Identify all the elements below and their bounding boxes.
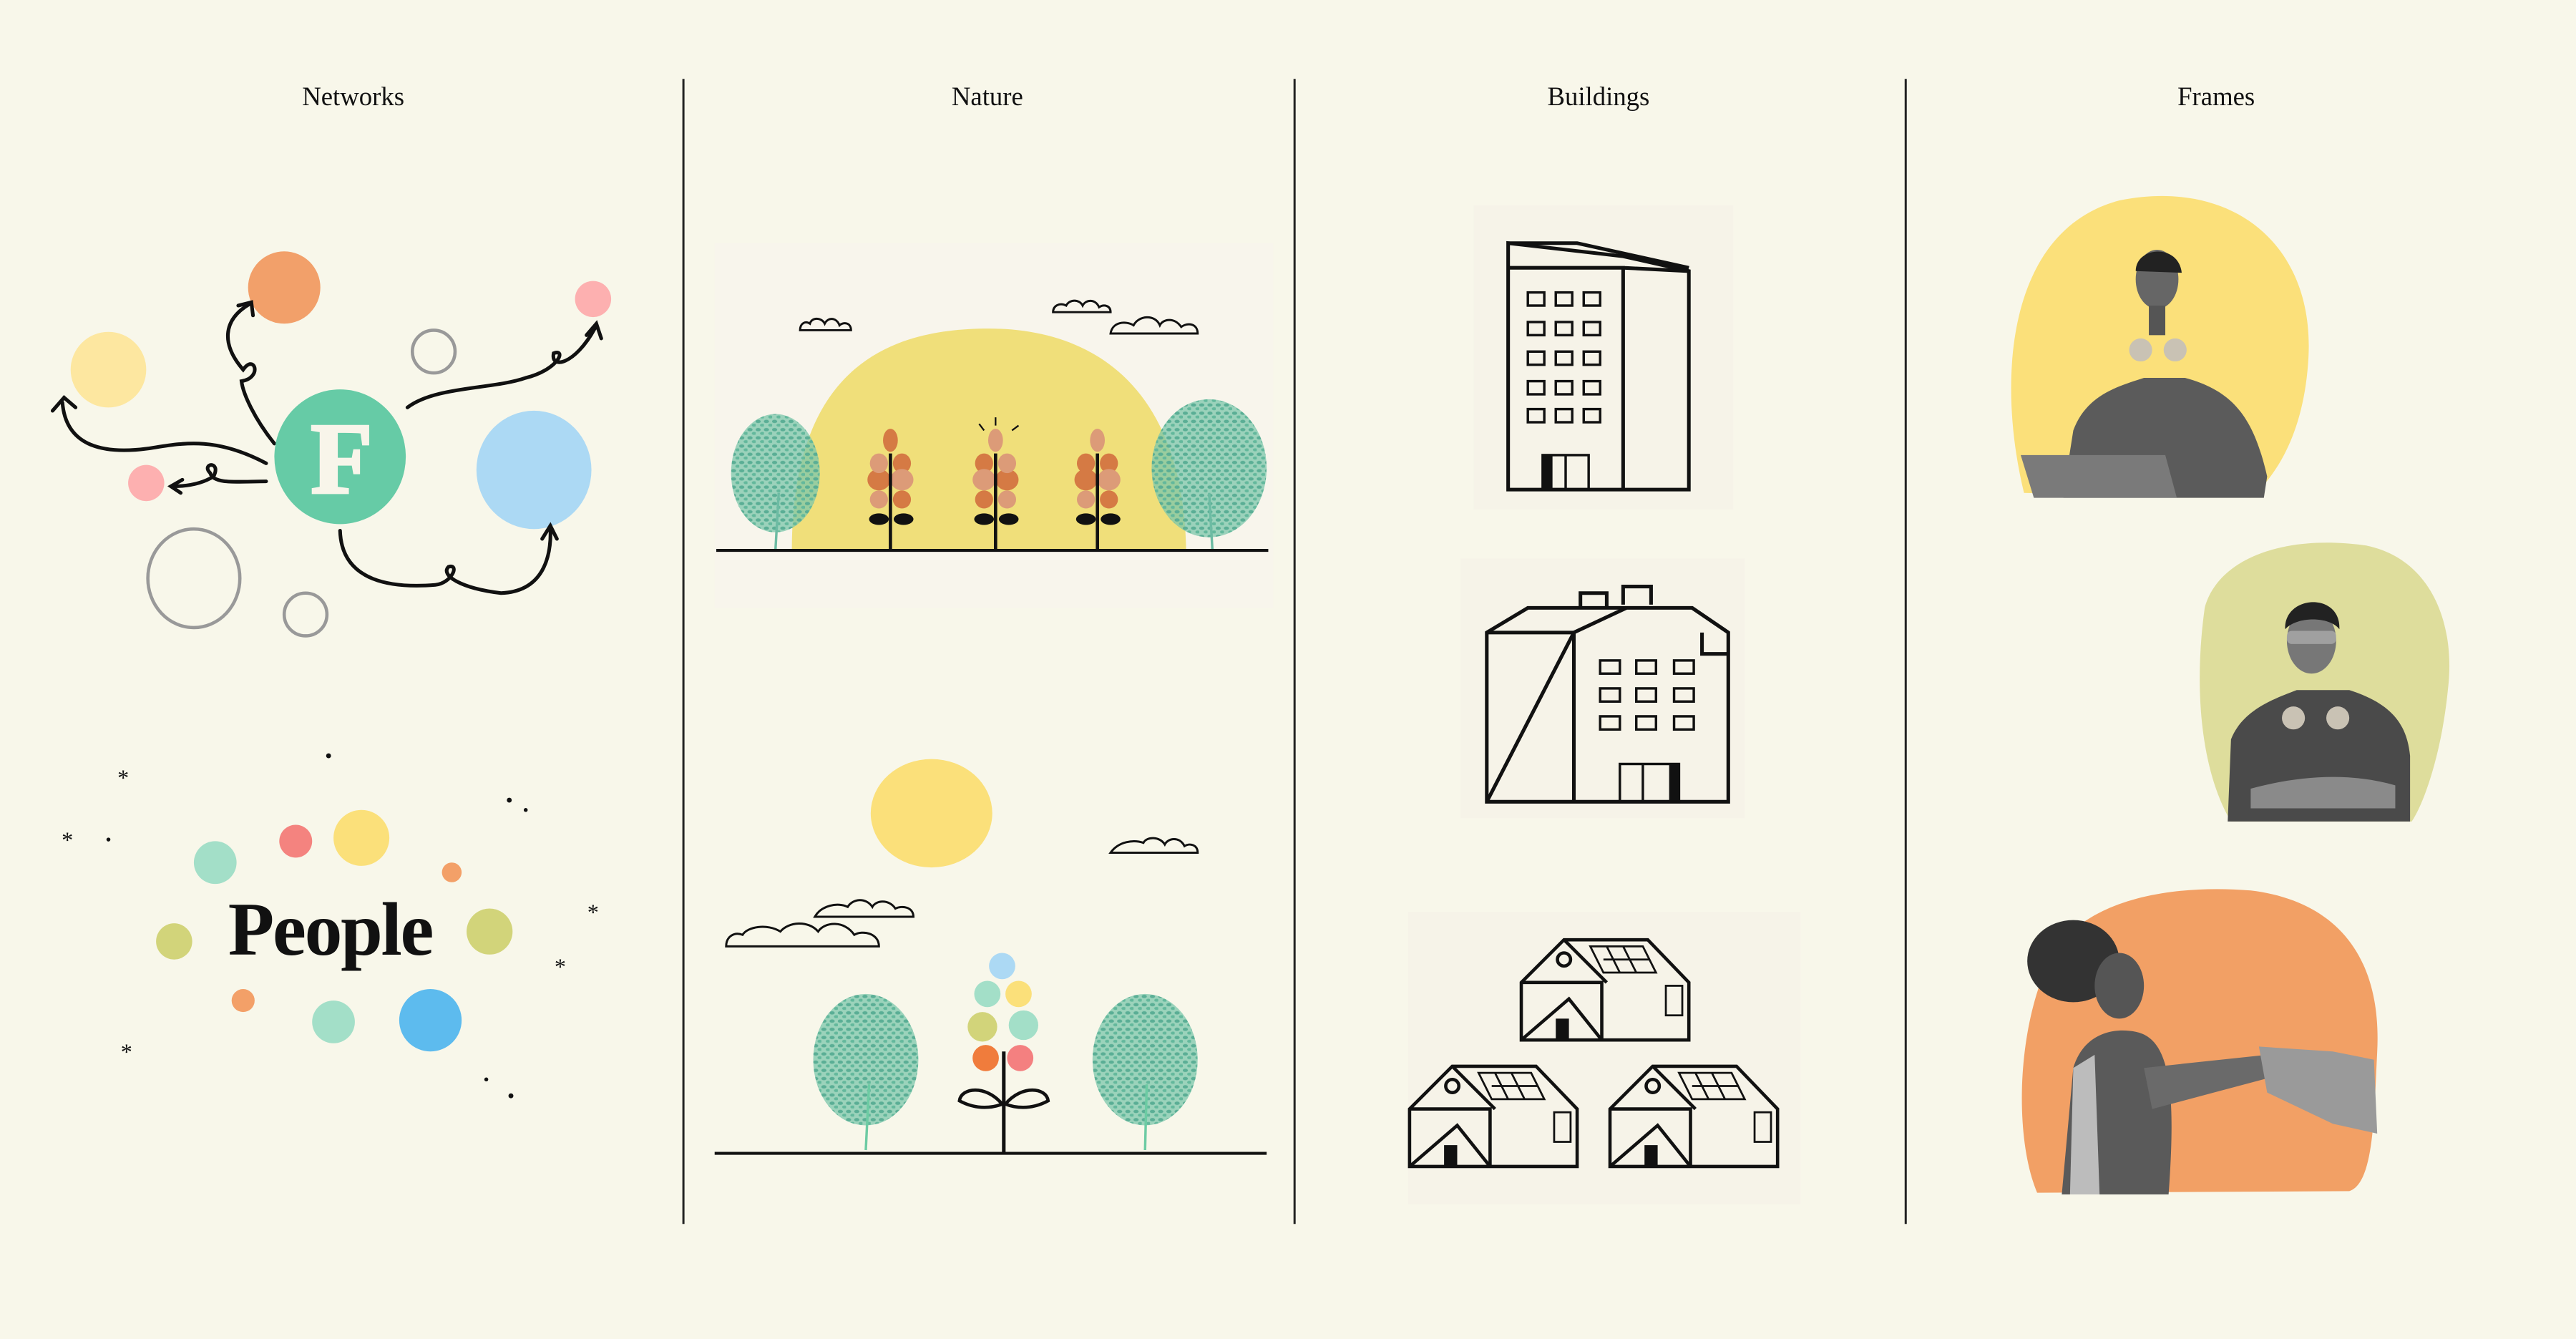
icon: trees	[731, 399, 1267, 550]
icon: F circle: F	[311, 402, 373, 515]
heading: Buildings: Buildings	[1548, 82, 1649, 111]
icon: trees bottom	[813, 994, 1198, 1150]
nature scene: growing plant	[715, 759, 1267, 1154]
people word cloud	[62, 754, 599, 1099]
nature scene: sunset field	[715, 243, 1273, 608]
icon: F circle	[274, 389, 406, 524]
people word cloud: *	[121, 1039, 132, 1065]
icon: plants	[867, 417, 1121, 550]
building: tall tower	[1473, 205, 1733, 510]
networks diagram	[52, 251, 611, 636]
frame: smiling man	[2200, 542, 2449, 822]
frame: woman with tool	[2022, 889, 2378, 1194]
heading: Frames: Frames	[2177, 82, 2255, 111]
building: mid-rise	[1460, 559, 1745, 818]
people word cloud: *	[117, 764, 129, 790]
heading: Networks: Networks	[302, 82, 404, 111]
heading: Nature: Nature	[952, 82, 1023, 111]
people word cloud: People	[228, 887, 433, 971]
people word cloud: *	[555, 953, 566, 979]
people word cloud: *	[62, 827, 73, 853]
icon: flower of dots	[960, 953, 1048, 1154]
building: solar houses	[1408, 912, 1800, 1204]
people word cloud: *	[587, 900, 599, 925]
frame: woman with laptop	[2011, 196, 2309, 498]
